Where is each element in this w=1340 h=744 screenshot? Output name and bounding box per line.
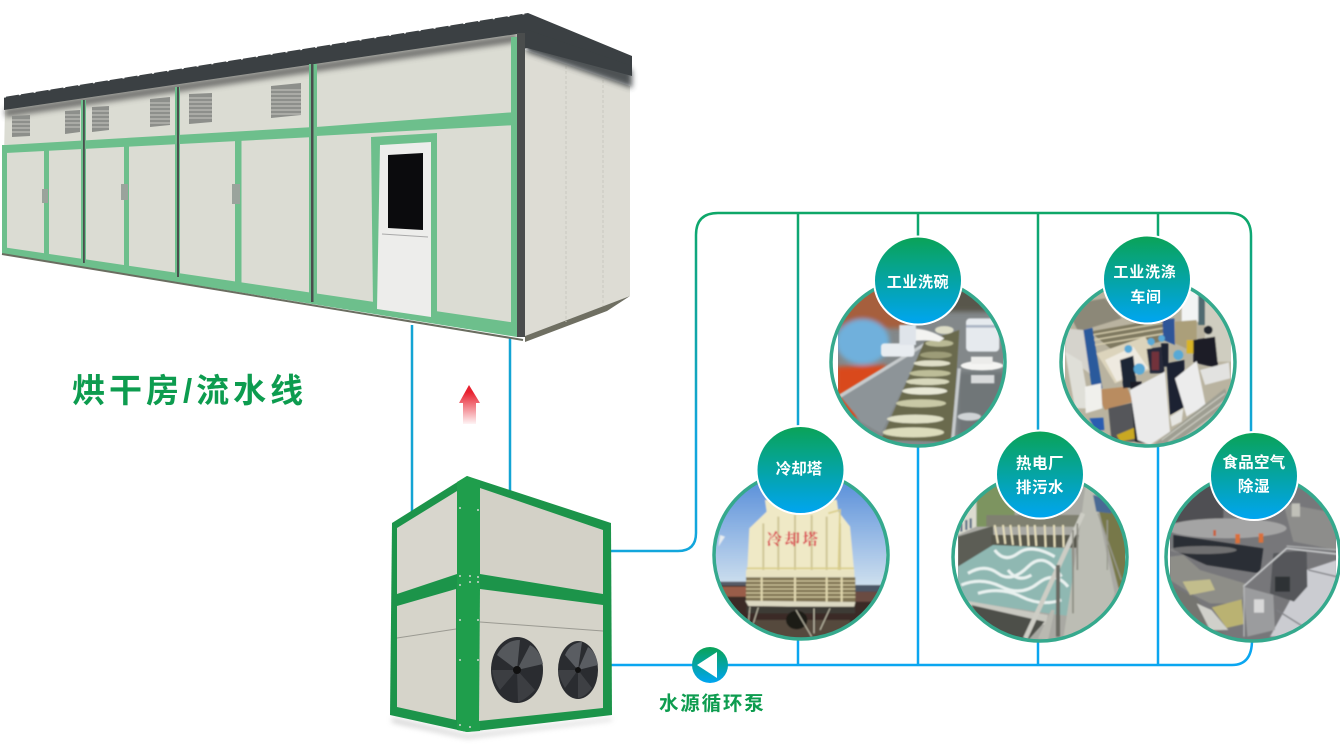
left lower panel — [397, 589, 456, 720]
badge — [1103, 236, 1191, 324]
ventilation louvers — [12, 83, 301, 137]
wastewater photo — [958, 486, 1125, 640]
title: 烘干房/流水线 — [72, 372, 307, 409]
left upper panel — [397, 491, 457, 594]
cooling tower photo: 冷却塔 — [767, 530, 821, 548]
ground shadow — [392, 718, 612, 738]
badge text: 冷却塔 — [776, 459, 823, 478]
badge — [756, 426, 844, 514]
water pump icon — [692, 647, 728, 683]
badge — [874, 236, 962, 324]
badge text: 工业洗涤 — [1113, 263, 1177, 281]
red up arrow — [459, 385, 480, 424]
right upper panel — [480, 488, 603, 594]
fan right — [558, 641, 598, 699]
photo ring — [1166, 473, 1340, 641]
right lower panel — [479, 589, 603, 721]
building side wall — [525, 50, 630, 336]
return water pipe network — [610, 444, 1252, 665]
photo ring — [953, 473, 1127, 641]
photo ring — [1061, 278, 1235, 446]
eave shadow — [5, 38, 517, 113]
building front wall — [2, 32, 517, 336]
badge — [996, 430, 1084, 518]
side eave shadow — [525, 40, 632, 88]
green frame — [390, 476, 612, 732]
heat pump unit — [390, 476, 612, 738]
roof — [4, 13, 632, 110]
pipes to drying room — [412, 325, 510, 512]
green posts — [2, 37, 517, 334]
badge text: 食品空气 — [1222, 452, 1286, 472]
supply water pipe network — [610, 213, 1251, 551]
cooling tower photo — [716, 484, 886, 638]
badge text: 热电厂 — [1016, 454, 1064, 472]
badge text: 工业洗碗 — [887, 273, 949, 291]
badge text line 2: 除湿 — [1238, 476, 1270, 496]
photo ring — [831, 278, 1005, 446]
white door — [377, 142, 431, 317]
badge — [1210, 432, 1298, 520]
panel: power plant wastewater — [945, 430, 1135, 647]
door handles — [42, 184, 240, 204]
frame bolts — [459, 507, 479, 728]
photo ring — [714, 471, 888, 639]
panel: food air dehumidification — [1160, 432, 1340, 647]
badge text line 2: 车间 — [1130, 288, 1162, 306]
food factory photo — [1170, 486, 1336, 640]
pump label: 水源循环泵 — [659, 693, 766, 715]
panel: industrial dishwashing — [820, 236, 1013, 452]
door window — [388, 153, 423, 230]
fan left — [491, 637, 543, 703]
green horizontal bands — [2, 112, 517, 337]
dark post lines — [83, 33, 525, 337]
laundry photo — [1065, 291, 1231, 444]
panel: industrial laundry — [1050, 236, 1242, 452]
badge text line 2: 排污水 — [1016, 478, 1064, 496]
door frame — [371, 133, 437, 317]
drying room building — [2, 13, 632, 342]
panel: cooling tower — [712, 425, 890, 641]
louver slats — [12, 90, 301, 132]
dishwashing photo — [838, 291, 1003, 444]
